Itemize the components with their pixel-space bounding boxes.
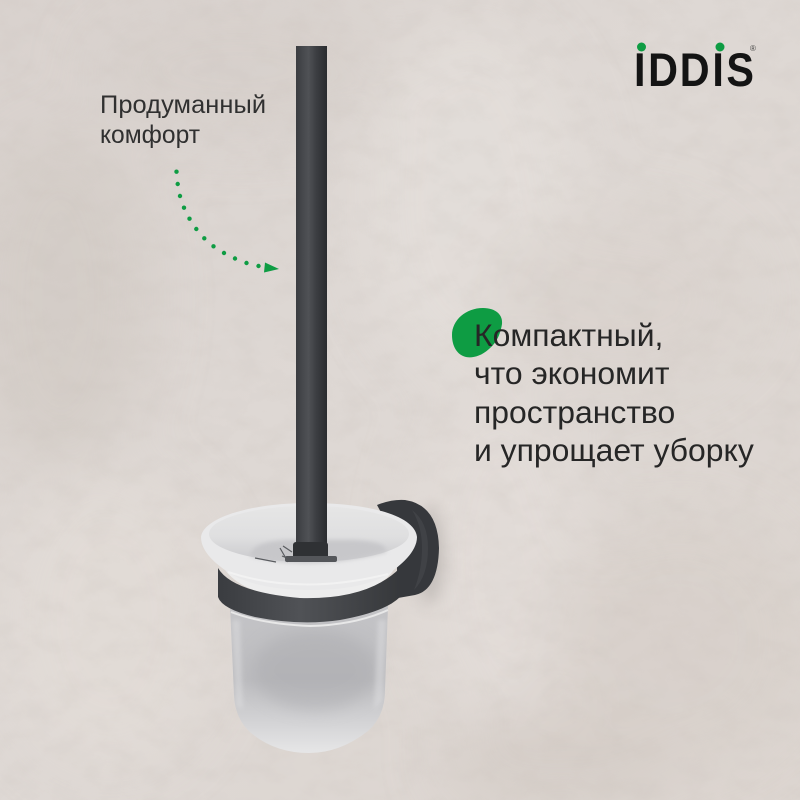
brush handle	[285, 46, 337, 562]
main message: Компактный,	[474, 317, 663, 353]
main message: что экономит	[474, 355, 670, 391]
cup shade	[253, 630, 377, 710]
note second line: комфорт	[100, 121, 201, 149]
brush bristles	[255, 546, 292, 562]
note: thoughtful comfort: Продуманный	[100, 91, 266, 119]
green blob accent	[452, 308, 502, 357]
logo: IDDIS: IDDIS	[634, 45, 754, 97]
bowl neck	[218, 552, 401, 600]
cup side highlight	[232, 620, 386, 710]
silver line under ring	[231, 610, 388, 626]
logo: IDDIS: ®	[750, 44, 756, 53]
glass bowl	[201, 503, 417, 590]
main message: и упрощает уборку	[474, 432, 754, 468]
main message	[474, 317, 754, 468]
wall mount	[377, 500, 444, 604]
dotted arrow	[174, 170, 279, 272]
metal ring	[218, 568, 400, 622]
frosted glass cup	[230, 606, 388, 753]
product: toilet brush holder	[201, 46, 444, 753]
main message: пространство	[474, 394, 675, 430]
